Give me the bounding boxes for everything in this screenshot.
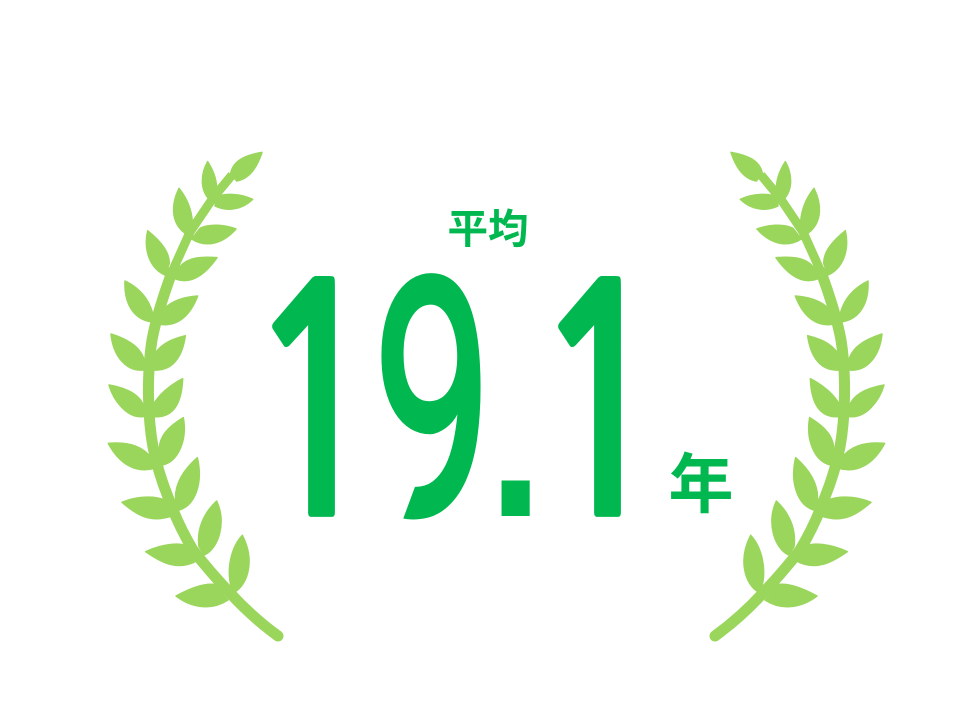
big number: 19.1: 1 xyxy=(526,250,678,564)
big number: 19.1: . xyxy=(488,300,543,567)
heading: average label: 平均 xyxy=(448,206,528,252)
icon: right laurel branch xyxy=(715,152,885,636)
big number: 19.1: 9 xyxy=(370,250,492,564)
big number: 19.1 xyxy=(272,273,621,520)
icon: left laurel branch xyxy=(108,152,278,636)
unit: years: 年 xyxy=(668,448,734,521)
big number: 19.1: 1 xyxy=(240,250,392,564)
